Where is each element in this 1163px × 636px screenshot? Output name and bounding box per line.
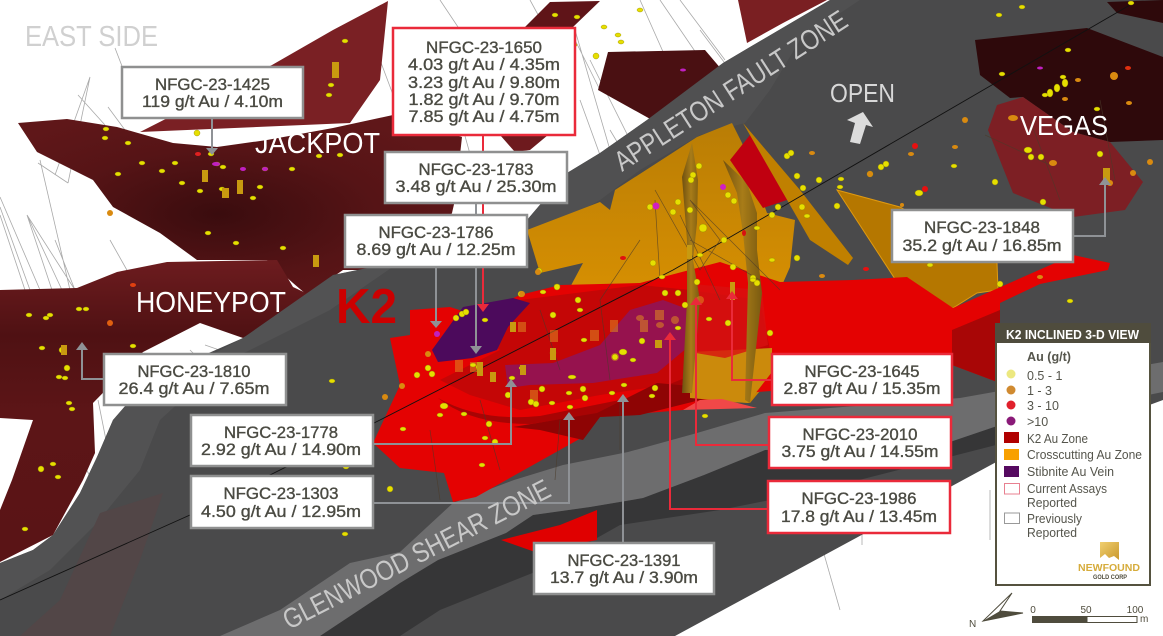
callout: NFGC-23-2010: NFGC-23-2010 [802,426,918,444]
twisted crosscutting lobes [682,143,762,403]
Appleton fault band [527,0,860,240]
callout: NFGC-23-1650: 7.85 g/t Au / 4.75m [408,108,560,126]
legend: >10: >10 [1027,415,1048,429]
connector: NFGC-23-1425 [206,118,218,155]
callout: NFGC-23-1778 [191,415,373,466]
callout: NFGC-23-1986: NFGC-23-1986 [802,490,916,508]
scale bar [1030,605,1148,625]
callout: NFGC-23-1645: 2.87 g/t Au / 15.35m [784,380,940,398]
K2 curved bowl shading [438,372,700,424]
connector: NFGC-23-1783 [470,203,482,354]
legend: 1-3: 1 - 3 [1027,384,1052,398]
callout: NFGC-23-1645 [772,354,952,405]
scale bar: 50 [1080,605,1092,616]
legend: 1-3 [1006,384,1052,398]
connector: NFGC-23-1786 [430,267,442,328]
dim translucent intercepts inside K2 [455,296,704,402]
crosscutting zone showing below K2 [690,348,772,403]
orange assay markers [107,72,1153,400]
scale bar: m [1140,614,1148,625]
zone: upper Jackpot lobe [140,1,388,132]
legend: K2 Au Zone [1004,432,1088,446]
north arrow [969,593,1023,630]
callout: NFGC-23-1425: 119 g/t Au / 4.10m [142,93,283,111]
K2 shadow strips [513,383,757,440]
callout: NFGC-23-1650 [393,28,575,135]
Glenwood shear band [220,362,1163,636]
logo: Newfound Gold Corp [1078,542,1140,581]
callout: NFGC-23-1778: NFGC-23-1778 [224,424,338,442]
dark drill traces over the zones [430,100,1115,500]
lighter rim of the gray mass [0,262,400,600]
zone: upper centre fragments [500,0,827,152]
stibnite vein: right [505,300,690,388]
darker strip below shear zone [320,425,1000,636]
purple and red assay markers [107,66,1131,337]
legend: Previously Reported [1004,512,1083,540]
callout: NFGC-23-1425: NFGC-23-1425 [155,76,270,94]
assay stacks [61,62,1110,382]
faded red zone under gray [20,493,163,636]
zone: Jackpot [18,115,462,295]
legend: Previously Reported: Reported [1027,526,1077,540]
connector: NFGC-23-1848 [1073,177,1111,236]
panel: legend [995,323,1151,585]
callout: NFGC-23-1650: 4.03 g/t Au / 4.35m [408,56,560,74]
arrow: open direction [847,112,873,144]
legend: Stibnite Au Vein: Stibnite Au Vein [1027,465,1114,479]
scale bar: 100 [1127,605,1144,616]
legend header [995,323,1151,343]
legend: Current Assays Reported [1004,482,1107,510]
callout: NFGC-23-1848 [892,210,1073,262]
red block zone [730,135,792,208]
legend header: K2 INCLINED 3-D VIEW [1006,327,1140,342]
scale bar: 0 [1030,605,1036,616]
callout: NFGC-23-1303: NFGC-23-1303 [224,485,338,503]
callout: NFGC-23-1848: NFGC-23-1848 [924,219,1040,237]
callout: NFGC-23-1391: 13.7 g/t Au / 3.90m [550,569,698,587]
callout: NFGC-23-1848: 35.2 g/t Au / 16.85m [902,237,1062,255]
legend: 3-10 [1006,399,1059,413]
legend: 0.5-1 [1006,369,1062,383]
legend: Current Assays Reported: Reported [1027,496,1077,510]
callout: NFGC-23-2010: 3.75 g/t Au / 14.55m [782,443,938,461]
K2 inner shading [440,285,770,410]
legend: K2 Au Zone: K2 Au Zone [1027,432,1088,446]
callout: NFGC-23-1986 [768,481,950,533]
crosscutting blade [743,123,853,265]
legend subtitle: Au (g/t) [1027,350,1071,364]
callout: NFGC-23-1986: 17.8 g/t Au / 13.45m [781,508,937,526]
translucent red over orange [690,284,768,358]
callout: NFGC-23-1391 [534,543,714,594]
connector: NFGC-23-1303 [373,412,575,503]
callout: NFGC-23-1303: 4.50 g/t Au / 12.95m [201,503,361,521]
callout: NFGC-23-1786: 8.69 g/t Au / 12.25m [356,241,516,259]
connector: NFGC-23-1645 [726,291,772,380]
legend: 0.5-1: 0.5 - 1 [1027,369,1062,383]
stibnite vein: left [432,298,530,362]
legend: 3-10: 3 - 10 [1027,399,1059,413]
connector: NFGC-23-1650 [477,135,489,312]
connector: NFGC-23-1810 [76,342,104,379]
callout: NFGC-23-1650: 1.82 g/t Au / 9.70m [408,91,560,109]
area label: Jackpot: JACKPOT [255,128,380,160]
zone: Honeypot [0,260,333,562]
north arrow: N [969,619,976,630]
area label: K2: K2 [336,280,397,334]
connector: NFGC-23-2010 [690,297,769,445]
callout: NFGC-23-1391: NFGC-23-1391 [568,552,680,570]
callout: NFGC-23-1783 [385,152,567,203]
logo: Newfound Gold Corp: GOLD CORP [1093,575,1127,581]
connector: NFGC-23-1778 [373,379,517,444]
connector: NFGC-23-1986 [664,332,768,509]
area label: Open: OPEN [830,78,895,108]
callout: NFGC-23-1783: 3.48 g/t Au / 25.30m [396,178,556,196]
K2 lower wedge below shear zone [501,510,597,552]
callout: NFGC-23-1778: 2.92 g/t Au / 14.90m [201,441,361,459]
top-right zone fragment [1107,0,1163,23]
callout: NFGC-23-1645: NFGC-23-1645 [804,363,920,381]
K2 Au zone [373,255,1110,502]
Vegas upper zone [975,28,1163,142]
area label: Honeypot: HONEYPOT [136,287,286,319]
legend: Current Assays Reported: Current Assays [1027,482,1107,496]
K2 sliver [683,399,757,410]
callout: NFGC-23-1783: NFGC-23-1783 [418,161,534,179]
callout: NFGC-23-1650: 3.23 g/t Au / 9.80m [408,74,560,92]
legend: Previously Reported: Previously [1027,512,1083,526]
area label: Vegas: VEGAS [1020,110,1108,141]
connector: NFGC-23-1391 [617,394,629,543]
callout: NFGC-23-1810: NFGC-23-1810 [138,363,250,381]
crosscutting Au zone: main [527,123,795,403]
callout: NFGC-23-1810: 26.4 g/t Au / 7.65m [118,380,270,398]
callout: NFGC-23-1786: NFGC-23-1786 [378,224,494,242]
crosscutting Au zone: right block [837,190,998,308]
callout: NFGC-23-2010 [769,417,951,468]
callout: NFGC-23-1425 [122,67,303,118]
callout: NFGC-23-1303 [191,476,373,528]
callout: NFGC-23-1650: NFGC-23-1650 [426,39,542,57]
K2 right lower shade [952,310,1000,383]
Vegas lower zone [988,97,1143,217]
callout: NFGC-23-1810 [104,354,286,405]
fault label: Glenwood Shear Zone: GLENWOOD SHEAR ZONE [278,473,555,635]
logo: Newfound Gold Corp: NEWFOUND [1078,562,1140,574]
legend: Crosscutting Au Zone: Crosscutting Au Zone [1027,448,1142,462]
area label: East Side: EAST SIDE [25,21,158,53]
legend: >10 [1006,415,1048,429]
callout: NFGC-23-1786 [345,215,527,267]
